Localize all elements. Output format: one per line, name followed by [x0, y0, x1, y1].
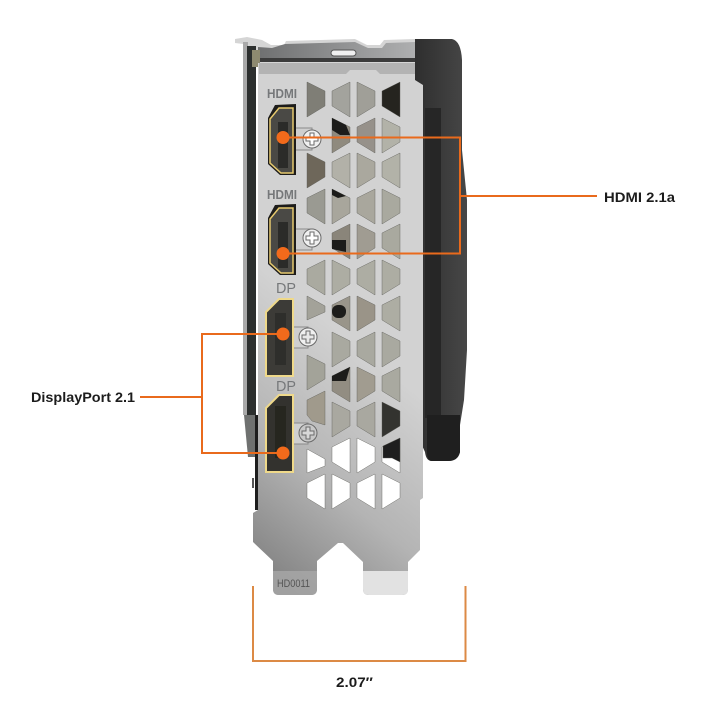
label: HDMI 2.1a: HDMI 2.1a: [604, 189, 675, 205]
screws: [299, 130, 321, 442]
port labels on bracket: HDMI: [267, 187, 297, 202]
port: HDMI 2: [268, 204, 296, 275]
top mounting tab: [235, 37, 415, 63]
width dimension bracket: [253, 586, 466, 661]
DisplayPort callout lines: [140, 334, 283, 453]
bracket part number: HD0011: [277, 578, 310, 590]
left rail: [243, 42, 260, 510]
metal bracket plate: [253, 63, 423, 595]
callout dots: [276, 131, 290, 460]
port: HDMI 1: [268, 104, 296, 175]
cooler details seen through holes: [332, 118, 350, 381]
port labels on bracket: [267, 86, 297, 395]
ventilation holes: [307, 82, 400, 509]
label: width: 2.07″: [336, 674, 373, 690]
port labels on bracket: HDMI: [267, 86, 297, 101]
label: DisplayPort 2.1: DisplayPort 2.1: [31, 389, 135, 405]
screw mounts: [293, 128, 312, 444]
fan shroud: [415, 39, 467, 461]
bracket tab light bands: [273, 571, 408, 595]
port: DisplayPort 2: [266, 395, 293, 472]
port: DisplayPort 1: [266, 299, 293, 376]
HDMI callout lines: [283, 138, 597, 254]
bracket shading near the top: [259, 63, 415, 74]
port labels on bracket: DP: [276, 280, 296, 297]
port labels on bracket: DP: [276, 378, 296, 395]
